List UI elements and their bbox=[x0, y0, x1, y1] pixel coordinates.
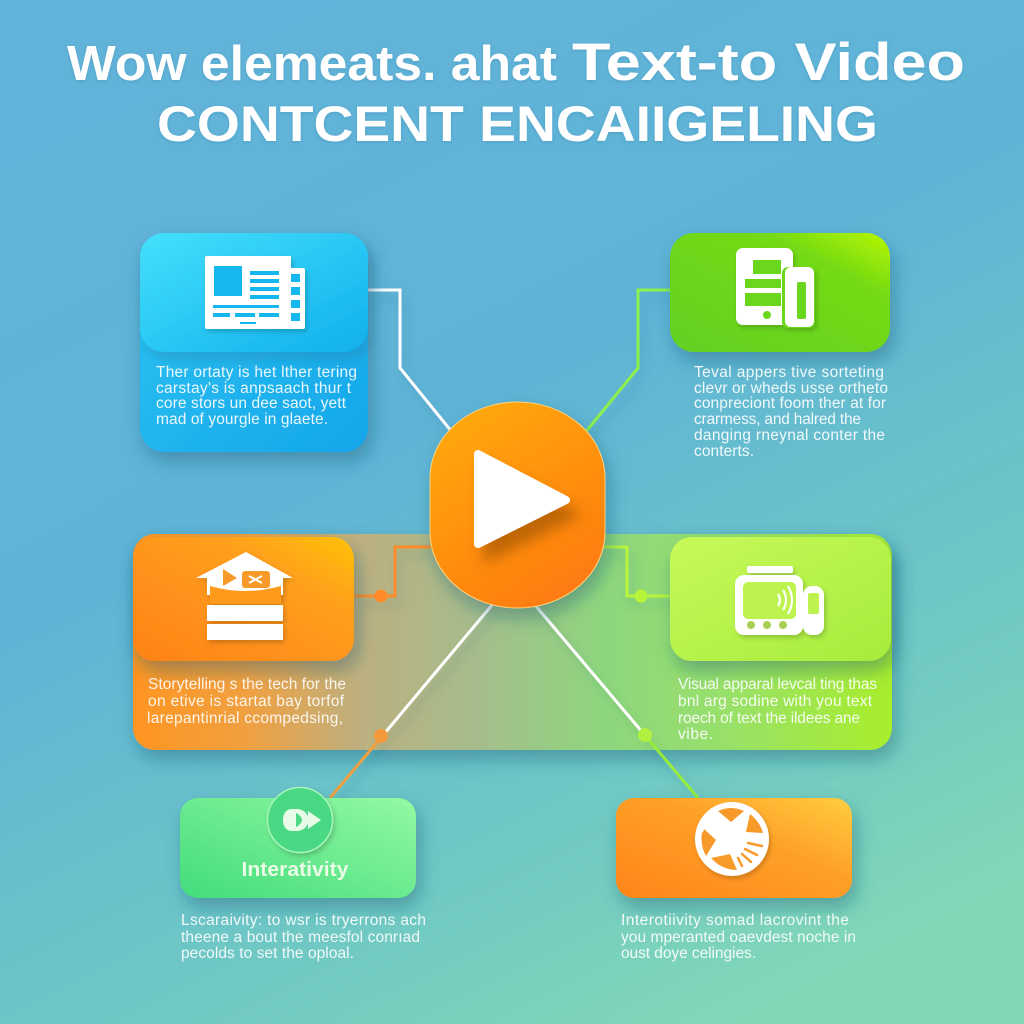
connector: middle left bbox=[354, 547, 434, 596]
icon: circular play badge bbox=[268, 788, 332, 852]
body text: larepantinrial ccompedsing, bbox=[147, 710, 343, 727]
card header bbox=[140, 233, 368, 352]
body text: carstay's is anpsaach thur t bbox=[156, 380, 352, 397]
body text bbox=[181, 912, 426, 962]
panel: middle right lime bbox=[670, 537, 891, 743]
body text: theene a bout the meesfol conrıad bbox=[181, 929, 420, 946]
card label: Interativity bbox=[242, 859, 349, 881]
card header bbox=[180, 798, 416, 898]
connector nodes bbox=[374, 590, 652, 743]
title bbox=[67, 33, 965, 152]
body text bbox=[694, 364, 888, 460]
card header bbox=[133, 537, 354, 661]
body text: Visual apparal levcal ting thas bbox=[678, 676, 877, 693]
body text: core stors un dee saot, yett bbox=[156, 395, 347, 412]
connector: lower right bbox=[535, 605, 698, 798]
icon: house with video bbox=[196, 552, 293, 640]
icon: film reel bbox=[695, 802, 769, 876]
panel: top left blue bbox=[140, 233, 368, 452]
body text: oust doye celingies. bbox=[621, 945, 756, 962]
card header bbox=[670, 537, 891, 661]
card header bbox=[616, 798, 852, 898]
icon: document with film strip bbox=[205, 256, 305, 329]
body text: you mperanted oaevdest noche in bbox=[621, 929, 856, 946]
connector lines bbox=[330, 290, 698, 798]
icon: media device bbox=[735, 566, 824, 635]
body text: conterts. bbox=[694, 443, 754, 460]
body text: on etive is startat bay torfof bbox=[148, 693, 345, 710]
body text bbox=[621, 912, 856, 962]
panel: middle left orange bbox=[133, 537, 354, 727]
connector: top right bbox=[584, 290, 670, 434]
icon: central play button bbox=[430, 402, 605, 608]
panel: top right green bbox=[670, 233, 890, 460]
play triangle bbox=[478, 454, 566, 544]
body text: Lscaraivity: to wsr is tryerrons ach bbox=[181, 912, 426, 929]
body text: Storytelling s the tech for the bbox=[148, 676, 346, 693]
body text bbox=[156, 364, 357, 428]
connector: lower left bbox=[330, 605, 492, 798]
title: CONTCENT ENCAIIGELING bbox=[157, 96, 878, 152]
body text: pecolds to set the oploal. bbox=[181, 945, 354, 962]
body text: bnl arg sodine with you text bbox=[678, 693, 873, 710]
title: Wow elemeats. ahat bbox=[67, 37, 557, 91]
body text: mad of yourgle in glaete. bbox=[156, 411, 328, 428]
panel: bottom right orange bbox=[616, 798, 856, 962]
body text: vibe. bbox=[678, 726, 713, 743]
title: Text-to Video bbox=[572, 33, 965, 92]
body text bbox=[147, 676, 346, 727]
icon: phone and tablet bbox=[736, 248, 815, 328]
body text: clevr or wheds usse ortheto bbox=[694, 380, 888, 397]
body text: Ther ortaty is het lther tering bbox=[156, 364, 357, 381]
card body bbox=[140, 233, 368, 452]
body text: conpreciont foom ther at for bbox=[694, 395, 886, 412]
body text: Interotiivity somad lacrovint the bbox=[621, 912, 849, 929]
body text bbox=[678, 676, 877, 743]
card header bbox=[670, 233, 890, 352]
body text: Teval appers tive sorteting bbox=[694, 364, 884, 381]
connector: top left bbox=[368, 290, 452, 432]
body text: roech of text the ildees ane bbox=[678, 710, 860, 727]
panel: interactivity mint bbox=[180, 788, 426, 962]
body text: crarmess, and halred the bbox=[694, 411, 861, 428]
panel: middle band bbox=[133, 534, 892, 750]
connector: middle right bbox=[603, 547, 670, 596]
body text: danging rneynal conter the bbox=[694, 427, 885, 444]
